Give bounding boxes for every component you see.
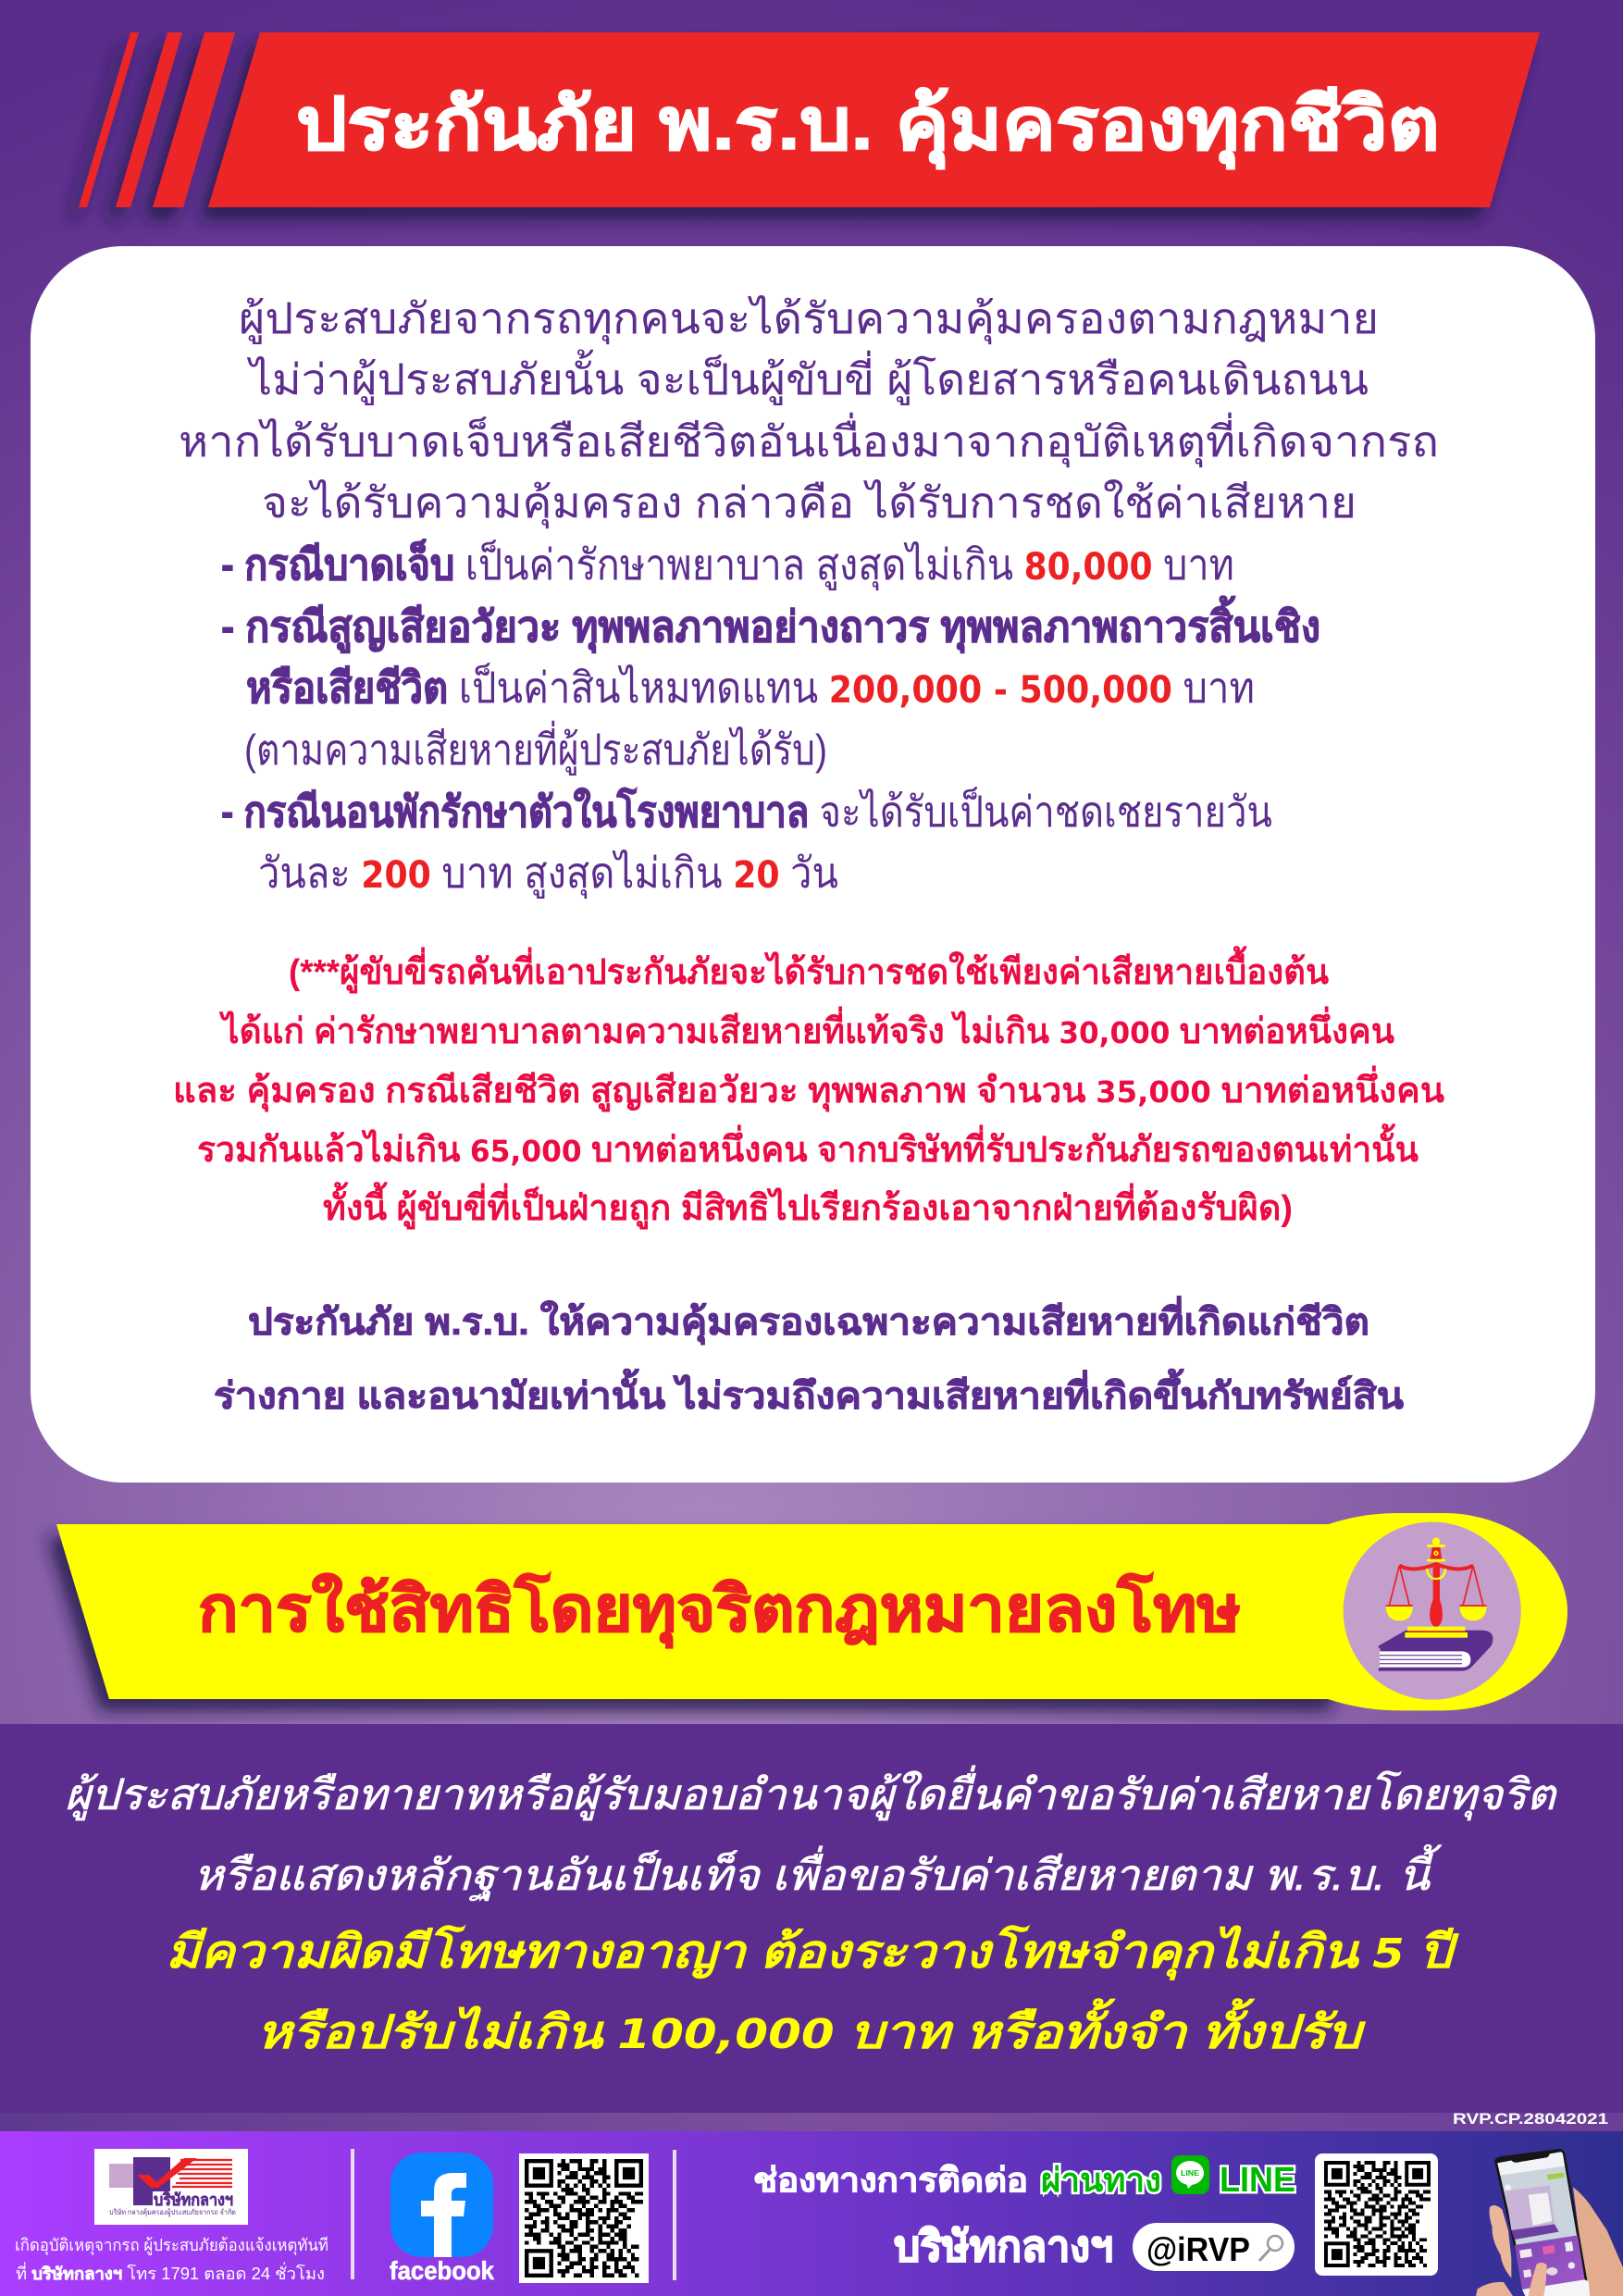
intro paragraph: ไม่ว่าผู้ประสบภัยนั้น จะเป็นผู้ขับขี่ ผู้โดยสารหรือคนเดินถนน <box>246 349 1369 405</box>
QR code: facebook <box>519 2153 649 2283</box>
title banner <box>79 32 1540 207</box>
icon: LINE <box>1171 2155 1209 2194</box>
penalty highlight line 2: หรือปรับไม่เกิน 100,000 บาท หรือทั้งจำ ทั้งปรับ <box>256 1998 1367 2058</box>
intro paragraph: หากได้รับบาดเจ็บหรือเสียชีวิตอันเนื่องมาจากอุบัติเหตุที่เกิดจากรถ <box>179 412 1439 468</box>
banner shape <box>56 1524 1342 1699</box>
hotline text <box>15 2236 328 2283</box>
phone in hand <box>1476 2149 1623 2296</box>
compensation list: - กรณีนอนพักรักษาตัวในโรงพยาบาล จะได้รับเป็นค่าชดเชยรายวัน <box>221 787 1272 836</box>
driver at fault note <box>173 946 1444 1230</box>
compensation list: (ตามความเสียหายที่ผู้ประสบภัยได้รับ) <box>244 720 827 776</box>
panel: coverage details <box>31 246 1595 1483</box>
compensation list: หรือเสียชีวิต เป็นค่าสินไหมทดแทน 200,000 - 500,000 บาท <box>246 663 1255 712</box>
scope statement: ร่างกาย และอนามัยเท่านั้น ไม่รวมถึงความเสียหายที่เกิดขึ้นกับทรัพย์สิน <box>214 1369 1404 1417</box>
company logo: บริษัท กลางคุ้มครองผู้ประสบภัยจากรถ จำกัด <box>109 2208 236 2217</box>
driver at fault note: (***ผู้ขับขี่รถคันที่เอาประกันภัยจะได้รับการชดใช้เพียงค่าเสียหายเบื้องต้น <box>289 946 1329 994</box>
icon: facebook <box>390 2153 494 2285</box>
code strip <box>0 2110 1623 2131</box>
intro paragraph: ผู้ประสบภัยจากรถทุกคนจะได้รับความคุ้มครองตามกฎหมาย <box>239 294 1379 345</box>
banner stripes <box>79 32 1540 207</box>
driver at fault note: รวมกันแล้วไม่เกิน 65,000 บาทต่อหนึ่งคน จากบริษัทที่รับประกันภัยรถของตนเท่านั้น <box>197 1123 1419 1170</box>
intro paragraph: จะได้รับความคุ้มครอง กล่าวคือ ได้รับการชดใช้ค่าเสียหาย <box>262 478 1357 529</box>
driver at fault note: ได้แก่ ค่ารักษาพยาบาลตามความเสียหายที่แท้จริง ไม่เกิน 30,000 บาทต่อหนึ่งคน <box>218 1006 1394 1051</box>
compensation list: - กรณีสูญเสียอวัยวะ ทุพพลภาพอย่างถาวร ทุพพลภาพถาวรสิ้นเชิง <box>221 595 1320 653</box>
document code: RVP.CP.28042021 <box>1453 2110 1608 2128</box>
LINE id pill: @iRVP <box>1146 2230 1250 2268</box>
icon: LINE: LINE <box>1181 2169 1200 2178</box>
contact channels: บริษัทกลางฯ <box>894 2222 1113 2270</box>
icon: scales of justice on book <box>1328 1513 1567 1710</box>
driver at fault note: และ คุ้มครอง กรณีเสียชีวิต สูญเสียอวัยวะ ทุพพลภาพ จำนวน 35,000 บาทต่อหนึ่งคน <box>173 1065 1444 1112</box>
penalty description: ผู้ประสบภัยหรือทายาทหรือผู้รับมอบอำนาจผู้ใดยื่นคำขอรับค่าเสียหายโดยทุจริต <box>65 1765 1557 1820</box>
penalty highlight: มีความผิดมีโทษทางอาญา ต้องระวางโทษจำคุกไม่เกิน 5 ปี <box>166 1924 1459 1980</box>
contact channels <box>753 2155 1295 2271</box>
scope statement: ประกันภัย พ.ร.บ. ให้ความคุ้มครองเฉพาะความเสียหายที่เกิดแก่ชีวิต <box>248 1296 1369 1346</box>
company logo: บริษัทกลางฯ <box>154 2191 233 2209</box>
compensation list <box>221 539 1320 900</box>
panel: fraud penalty <box>0 1724 1623 2113</box>
driver at fault note: ทั้งนี้ ผู้ขับขี่ที่เป็นฝ่ายถูก มีสิทธิไปเรียกร้องเอาจากฝ่ายที่ต้องรับผิด) <box>323 1182 1293 1230</box>
hotline text: เกิดอุบัติเหตุจากรถ ผู้ประสบภัยต้องแจ้งเหตุทันที <box>15 2236 328 2255</box>
contact channels: ผ่านทาง <box>1041 2161 1161 2199</box>
yellow penalty banner <box>56 1513 1567 1710</box>
contact channels: LINE <box>1220 2161 1295 2200</box>
icon: facebook: facebook <box>390 2256 494 2285</box>
title text: ประกันภัย พ.ร.บ. คุ้มครองทุกชีวิต <box>296 83 1440 169</box>
heading: การใช้สิทธิโดยทุจริตกฎหมายลงโทษ <box>198 1572 1241 1648</box>
footer <box>0 2131 1623 2296</box>
penalty description line 2: หรือแสดงหลักฐานอันเป็นเท็จ เพื่อขอรับค่าเสียหายตาม พ.ร.บ. นี้ <box>193 1844 1442 1901</box>
compensation list: - กรณีบาดเจ็บ เป็นค่ารักษาพยาบาล สูงสุดไม่เกิน 80,000 บาท <box>221 539 1234 591</box>
hotline text: ที่ บริษัทกลางฯ โทร 1791 ตลอด 24 ชั่วโมง <box>16 2262 325 2283</box>
LINE id pill <box>1133 2223 1295 2271</box>
contact channels: ช่องทางการติดต่อ <box>753 2161 1028 2199</box>
scope statement <box>214 1296 1404 1417</box>
QR code: LINE <box>1315 2153 1438 2276</box>
compensation list: วันละ 200 บาท สูงสุดไม่เกิน 20 วัน <box>258 849 838 900</box>
company logo <box>94 2149 248 2225</box>
intro paragraph <box>179 294 1439 529</box>
